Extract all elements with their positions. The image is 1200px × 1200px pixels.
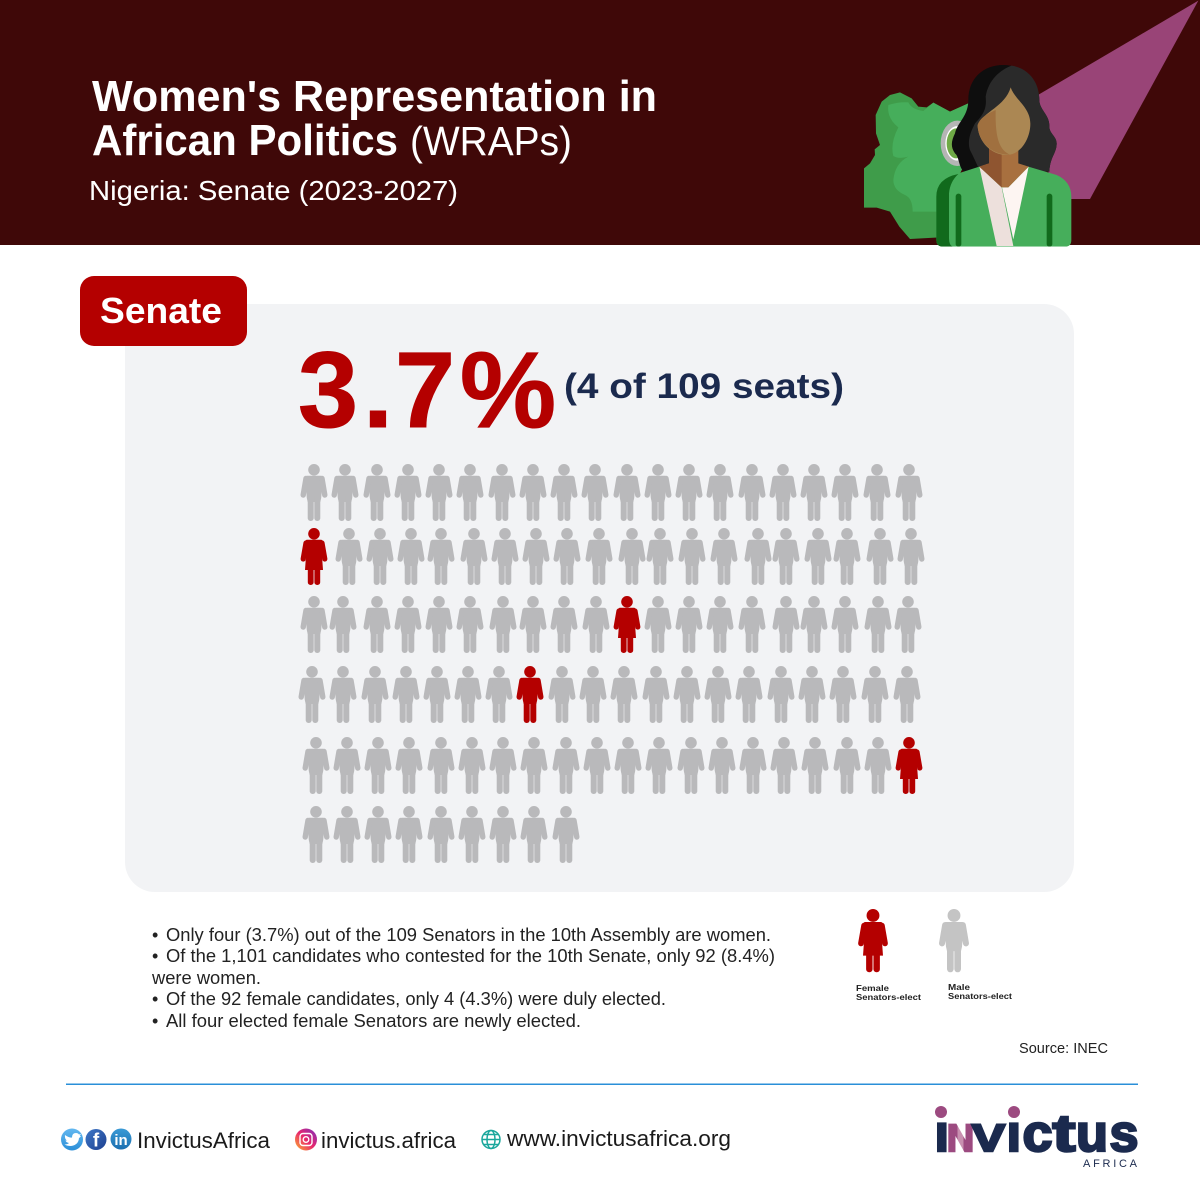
logo: invictus africa: t — [1052, 1105, 1076, 1163]
footer divider — [66, 1084, 1138, 1085]
icon: twitter — [61, 1128, 83, 1150]
legend: male label: Senators-elect — [948, 991, 1012, 1001]
title: (WRAPs) — [410, 118, 572, 164]
logo: invictus africa: ı — [934, 1105, 949, 1163]
legend: female icon — [861, 909, 885, 972]
woman — [936, 65, 1071, 247]
legend: male label: Male — [948, 982, 970, 992]
key facts: • — [152, 946, 158, 966]
logo: invictus africa: s — [1110, 1105, 1138, 1163]
legend: male icon — [942, 909, 966, 972]
logo: invictus africa: u — [1076, 1105, 1108, 1163]
title: African Politics — [92, 116, 398, 165]
icon: instagram — [295, 1128, 317, 1150]
legend: male label — [948, 982, 1012, 1001]
logo: invictus africa — [934, 1105, 1138, 1170]
key facts: All four elected female Senators are newly elected. — [166, 1011, 581, 1031]
map of Nigeria — [864, 92, 980, 239]
key facts: Of the 92 female candidates, only 4 (4.3%) were duly elected. — [166, 989, 666, 1009]
subtitle: Nigeria: Senate (2023-2027) — [89, 175, 458, 206]
senate badge — [80, 276, 247, 346]
icon: linkedin — [110, 1128, 132, 1150]
row 3 — [303, 596, 919, 653]
icon: facebook: f — [93, 1130, 100, 1152]
purple spotlight — [1027, 1, 1198, 199]
pictogram: 109 seats — [301, 464, 922, 863]
icon: globe — [482, 1130, 500, 1148]
legend: female label: Female — [856, 983, 889, 993]
row 6 — [305, 806, 577, 863]
key facts: Only four (3.7%) out of the 109 Senators in the 10th Assembly are women. — [166, 925, 771, 945]
header band — [0, 0, 1200, 245]
row 5 — [305, 737, 889, 794]
logo: invictus africa: c — [1022, 1105, 1052, 1163]
senate badge: Senate — [100, 290, 222, 331]
logo: invictus africa: V — [972, 1118, 1006, 1160]
row 2 — [338, 528, 922, 585]
seats label: (4 of 109 seats) — [564, 367, 844, 406]
key facts — [151, 925, 775, 1031]
legend: female label: Senators-elect — [856, 992, 921, 1002]
handle: InvictusAfrica: InvictusAfrica — [137, 1128, 271, 1153]
handle: website: www.invictusafrica.org — [506, 1126, 731, 1151]
social handles — [61, 1126, 731, 1153]
key facts: Of the 1,101 candidates who contested for the 10th Senate, only 92 (8.4%) — [166, 946, 775, 966]
handle: invictus.africa: invictus.africa — [321, 1128, 457, 1153]
row 4 — [301, 666, 918, 723]
key facts: were women. — [151, 968, 261, 988]
key facts: • — [152, 925, 158, 945]
logo: invictus africa: N — [947, 1118, 974, 1160]
icon: facebook — [86, 1129, 106, 1152]
panel: senate chart — [125, 304, 1074, 892]
key facts: • — [152, 1011, 158, 1031]
legend — [856, 909, 1012, 1002]
illustration: woman in front of Nigeria map — [864, 1, 1198, 247]
legend: female label — [856, 983, 921, 1002]
title: Women's Representation in — [92, 72, 657, 121]
title — [92, 72, 657, 165]
source: Source: INEC — [1019, 1041, 1108, 1057]
highlighted women and elected figures — [303, 528, 920, 794]
icon: linkedin: in — [114, 1132, 128, 1149]
row 1 — [303, 464, 920, 521]
headline percentage: 3.7% — [298, 329, 556, 450]
logo: invictus africa: ı — [1006, 1105, 1021, 1163]
key facts: • — [152, 989, 158, 1009]
logo: invictus africa: AFRICA — [1083, 1158, 1138, 1170]
